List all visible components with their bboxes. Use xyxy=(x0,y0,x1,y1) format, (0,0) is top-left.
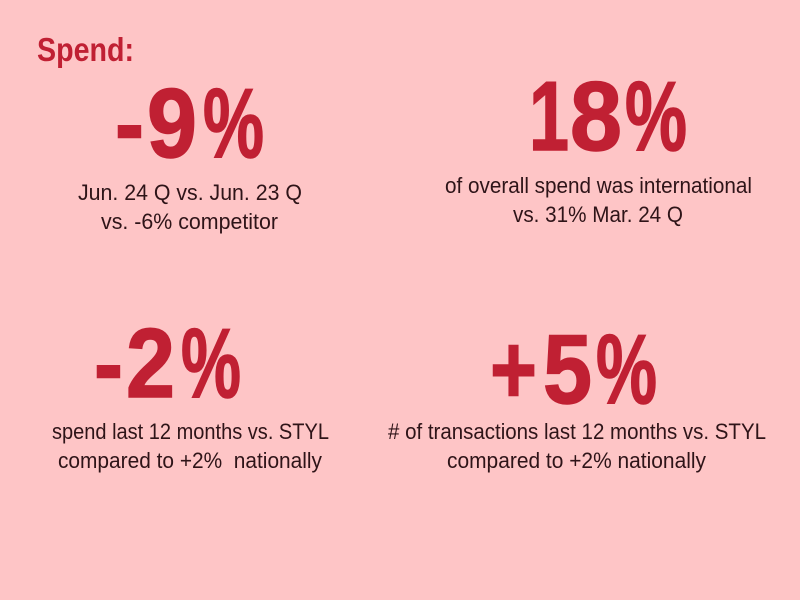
big number: -9%: 9 xyxy=(147,68,197,178)
description: -9%: Jun. 24 Q vs. Jun. 23 Q xyxy=(78,180,302,205)
big number: +5%: + xyxy=(490,314,537,424)
big number: +5%: % xyxy=(596,314,657,424)
big number: -2%: 2 xyxy=(126,308,175,418)
big number: -9% xyxy=(115,68,264,178)
big number: 18% xyxy=(529,61,687,171)
description: +5% xyxy=(388,419,766,473)
heading: Spend: Spend: xyxy=(37,31,134,68)
description: -9%: vs. -6% competitor xyxy=(101,209,278,234)
big number: 18%: % xyxy=(625,61,687,171)
big number: -2%: - xyxy=(94,308,123,418)
big number: -9%: - xyxy=(115,68,144,178)
big number: +5%: 5 xyxy=(543,314,592,424)
stat block: 18% xyxy=(445,61,752,227)
description: +5%: # of transactions last 12 months vs. STYL xyxy=(388,419,766,444)
stat block: -9% xyxy=(78,68,302,234)
big number: 18%: 1 xyxy=(529,61,569,171)
big number: -9%: % xyxy=(203,68,264,178)
description: 18%: vs. 31% Mar. 24 Q xyxy=(513,202,683,227)
description: 18% xyxy=(445,173,752,227)
description: +5%: compared to +2% nationally xyxy=(447,448,706,473)
description: 18%: of overall spend was international xyxy=(445,173,752,198)
stat block: +5% xyxy=(388,314,766,473)
stat block: -2% xyxy=(52,308,329,473)
big number: 18%: 8 xyxy=(570,61,622,171)
description: -2%: compared to +2% nationally xyxy=(58,448,322,473)
description: -2%: spend last 12 months vs. STYL xyxy=(52,419,329,444)
big number: -2% xyxy=(94,308,241,418)
description: -2% xyxy=(52,419,329,473)
description: -9% xyxy=(78,180,302,234)
big number: +5% xyxy=(490,314,657,424)
big number: -2%: % xyxy=(181,308,241,418)
